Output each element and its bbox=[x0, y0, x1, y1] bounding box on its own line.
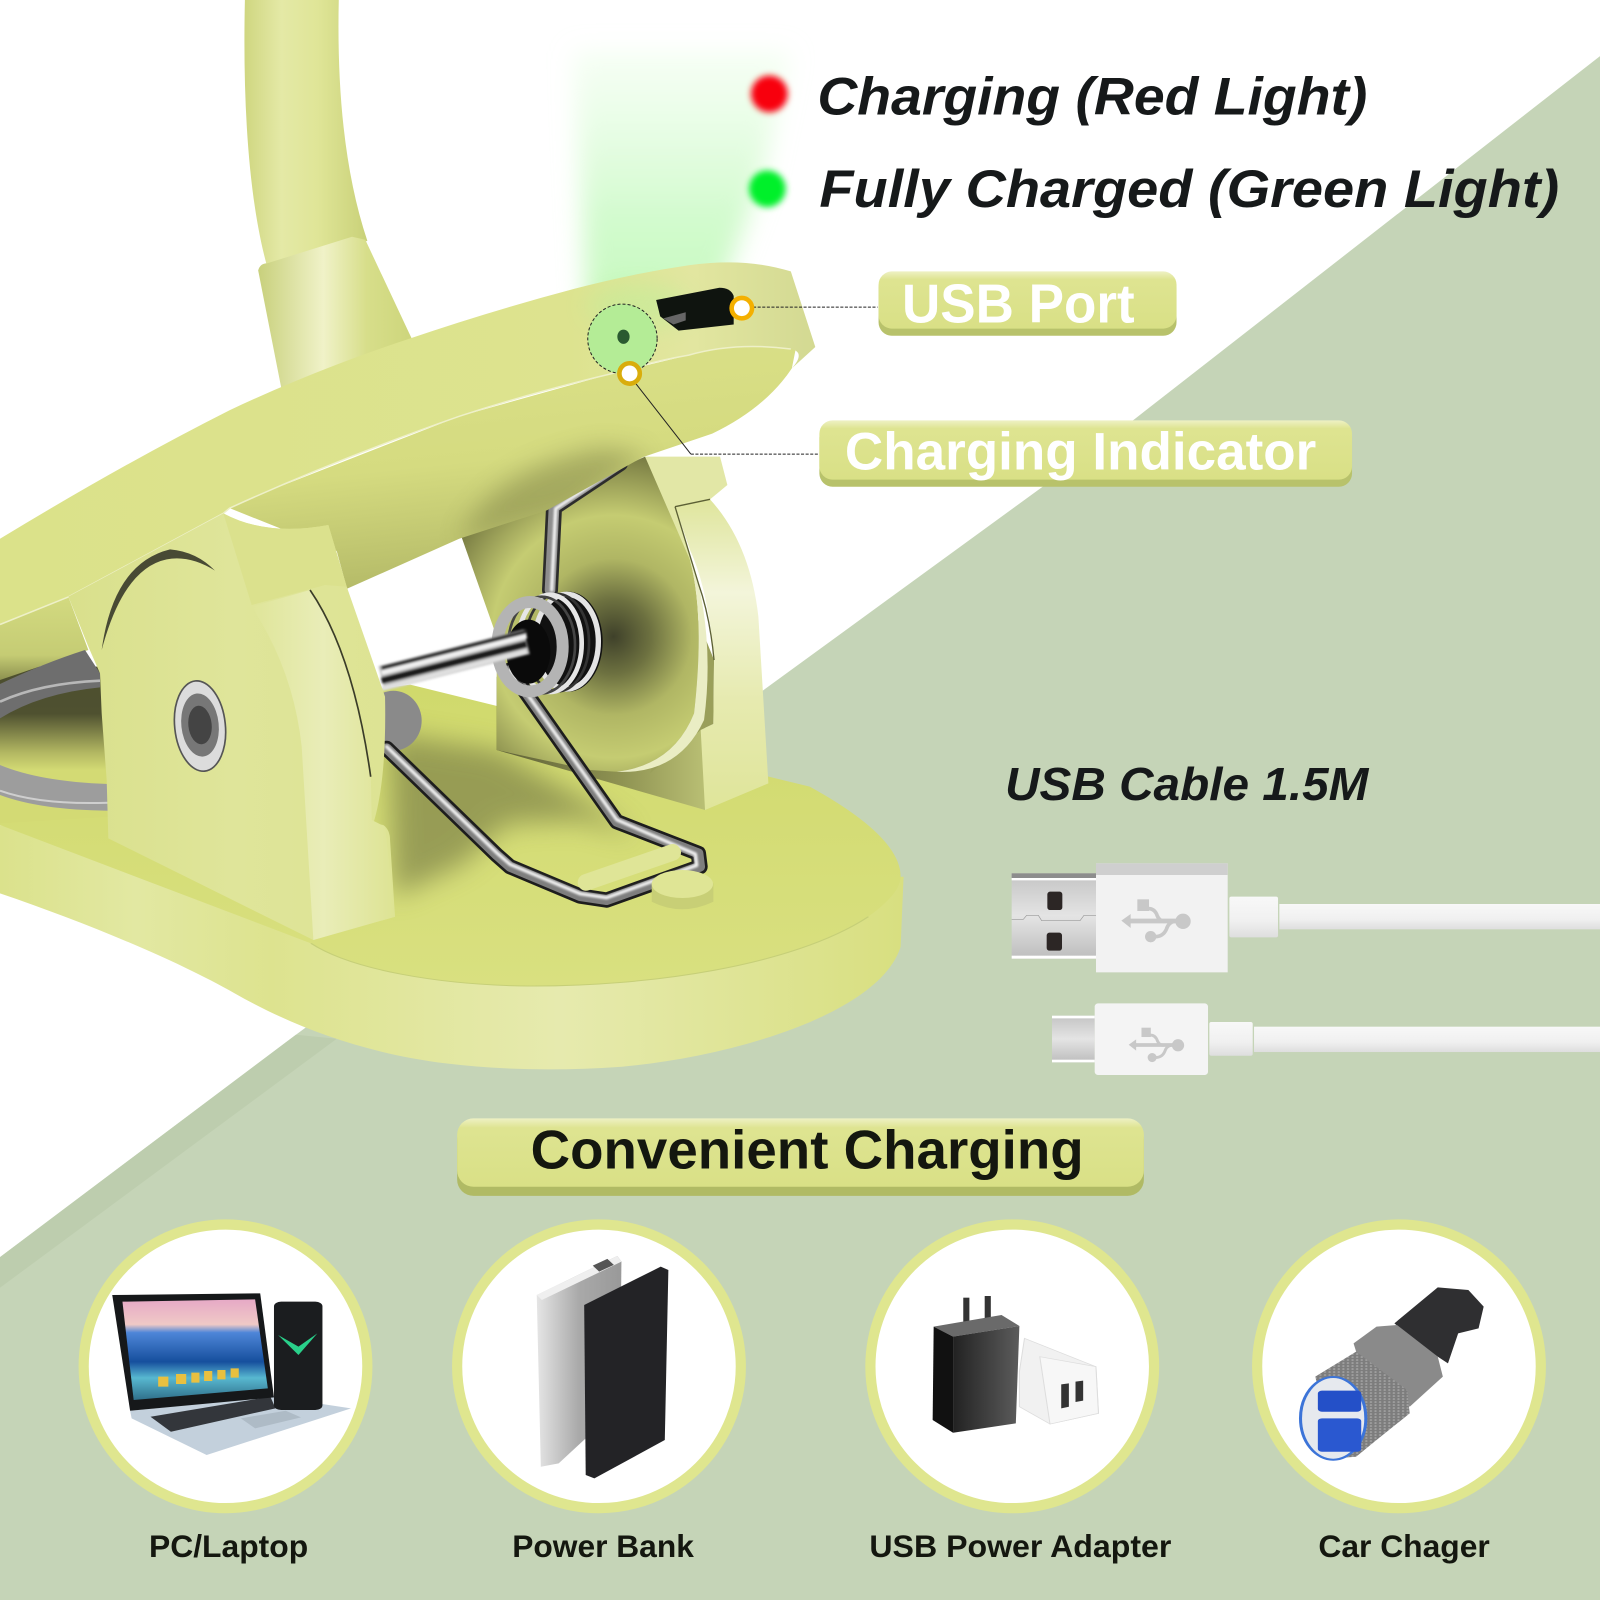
rear hinge block bbox=[497, 667, 705, 810]
left clamp block bbox=[68, 513, 395, 940]
panel: USB Power Adapter bbox=[870, 1224, 1154, 1508]
label: PC/Laptop: PC/Laptop bbox=[149, 1528, 308, 1564]
icon: car charger bbox=[1301, 1287, 1484, 1460]
legend: fully charged green light: Fully Charged (Green Light) bbox=[819, 160, 1559, 219]
green light glow bbox=[573, 51, 791, 306]
spring wires bbox=[387, 463, 700, 900]
grey disc bbox=[365, 691, 422, 751]
label: Charging Indicator: Charging Indicator bbox=[845, 422, 1316, 481]
icon: laptop and phone bbox=[112, 1293, 351, 1455]
USB-C cable bbox=[1052, 1003, 1600, 1075]
hinge crescent bbox=[102, 549, 215, 650]
callout: USB port marker bbox=[732, 298, 878, 318]
knob bbox=[652, 870, 713, 909]
panel: Car Charger bbox=[1257, 1224, 1541, 1508]
label: Power Bank: Power Bank bbox=[512, 1528, 694, 1564]
lamp base bbox=[0, 685, 904, 1069]
icon: wall adapters bbox=[933, 1296, 1098, 1433]
callout: charging indicator marker bbox=[619, 363, 818, 454]
screw bbox=[170, 678, 230, 774]
front band bbox=[252, 590, 395, 940]
indicator highlight bbox=[588, 304, 657, 373]
pad on wire bbox=[586, 852, 673, 882]
green tint on head bbox=[587, 284, 689, 329]
shaded recess beside disc bbox=[650, 617, 714, 773]
icon: USB port bbox=[656, 288, 734, 331]
lamp head rim bbox=[0, 262, 815, 624]
legend: charging red light: Charging (Red Light) bbox=[817, 67, 1367, 126]
rear hinge outer disc bbox=[675, 499, 768, 810]
label: Car Chager: Car Chager bbox=[1318, 1528, 1490, 1564]
spring coil bbox=[497, 592, 603, 693]
rear hinge rim bbox=[617, 560, 708, 772]
grey clamp pad bbox=[0, 765, 108, 811]
lamp head underside bbox=[219, 346, 796, 589]
label: USB Power Adapter: USB Power Adapter bbox=[869, 1528, 1171, 1564]
panel: PC/Laptop bbox=[84, 1224, 367, 1508]
label: USB Port: USB Port bbox=[902, 272, 1135, 334]
heading: Convenient Charging: Convenient Charging bbox=[531, 1118, 1084, 1180]
gooseneck arm bbox=[244, 0, 413, 390]
rear hinge top pillar bbox=[645, 457, 727, 583]
left clamp arm shadows bbox=[0, 597, 110, 823]
grey clamp arm bbox=[0, 650, 100, 718]
clamp hinge and torsion spring bbox=[365, 457, 768, 909]
hinge pin bbox=[382, 632, 527, 689]
shadow on base bbox=[390, 733, 637, 897]
upper plate bbox=[223, 513, 347, 605]
panel: Power Bank bbox=[457, 1224, 741, 1508]
USB-A cable bbox=[1012, 863, 1600, 972]
rear hinge disc bbox=[462, 457, 699, 772]
icon: power banks bbox=[537, 1256, 668, 1478]
heading: USB cable length: USB Cable 1.5M bbox=[1005, 758, 1370, 810]
heading: Convenient Charging bbox=[457, 1118, 1144, 1196]
